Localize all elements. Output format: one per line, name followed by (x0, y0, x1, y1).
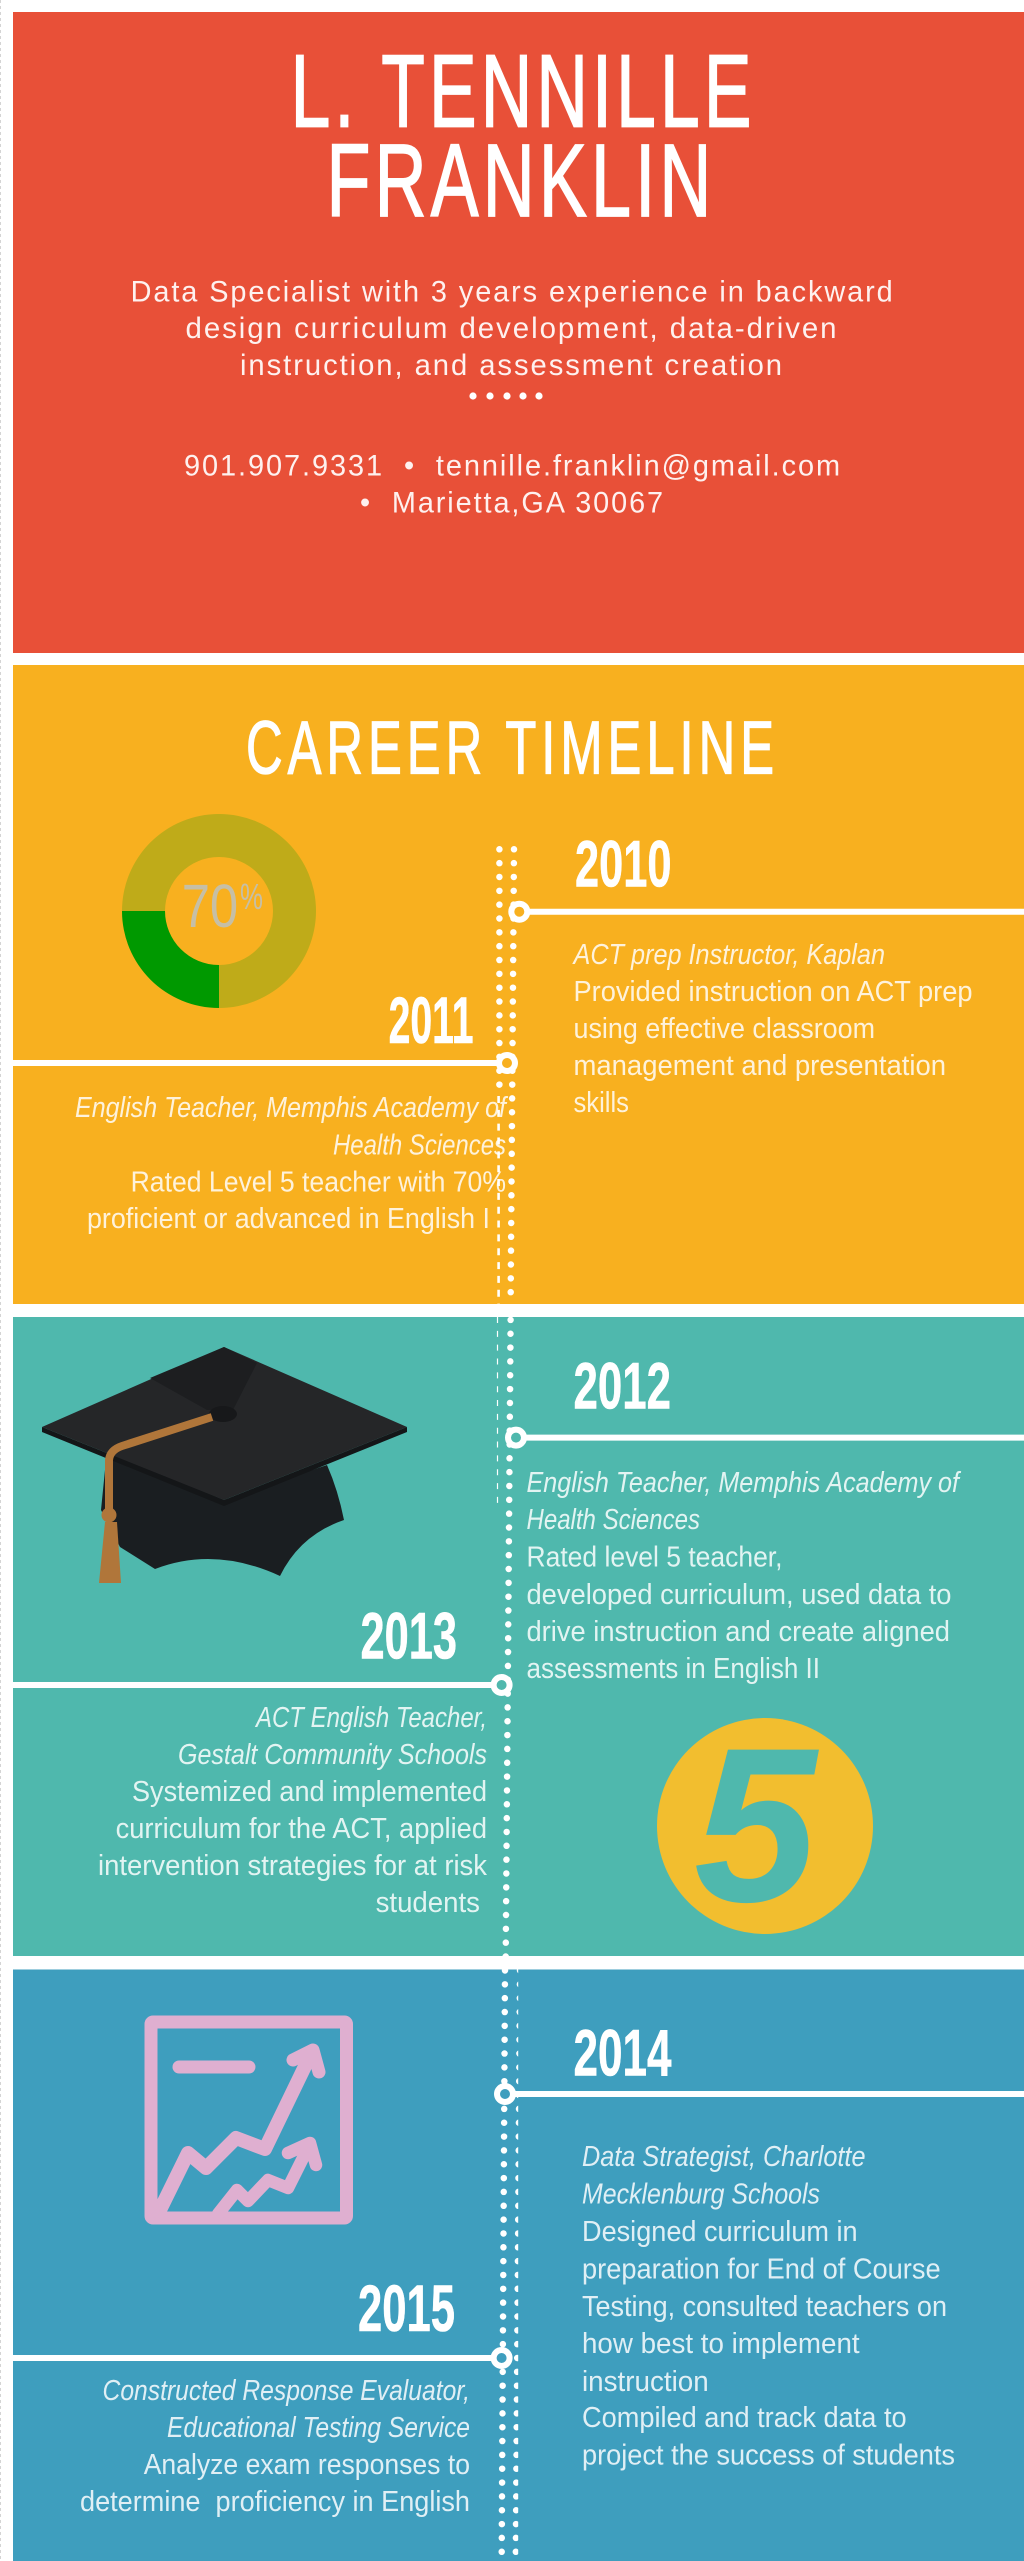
job: English teacher, level 5: assessments in English II (526, 1653, 820, 1685)
job: data strategist: Data Strategist, Charlotte (582, 2141, 866, 2173)
donut chart: 70% (122, 814, 316, 1008)
year: 2015: 2015 (358, 2271, 455, 2345)
job: constructed response evaluator: Educational Testing Service (167, 2412, 470, 2444)
summary text: instruction, and assessment creation (240, 349, 784, 382)
year: 2010: 2010 (575, 826, 672, 900)
job: data strategist: instruction (582, 2366, 709, 2398)
job: data strategist: preparation for End of Course (582, 2254, 941, 2286)
timeline marker: 2012 (508, 1430, 1024, 1446)
donut chart: 70%: 70 (182, 872, 238, 940)
job: English teacher Memphis Academy: English Teacher, Memphis Academy of (75, 1092, 509, 1124)
job: data strategist: Compiled and track data to (582, 2402, 907, 2434)
year: 2014: 2014 (574, 2016, 672, 2090)
title (291, 34, 756, 238)
year: 2013: 2013 (360, 1599, 457, 1673)
job: data strategist: project the success of students (582, 2439, 955, 2471)
timeline marker: 2010 (511, 904, 1024, 920)
timeline marker: 2015 (13, 2350, 510, 2366)
job: ACT English teacher: Systemized and implemented (132, 1776, 487, 1808)
title: FRANKLIN (327, 123, 716, 238)
year: 2011: 2011 (389, 983, 474, 1057)
timeline dots: right column (511, 849, 514, 1293)
job: ACT English teacher (98, 1702, 487, 1919)
job: ACT prep instructor: Provided instruction on ACT prep (574, 976, 972, 1008)
donut chart: 70%: % (240, 876, 263, 917)
panel: timeline 2014-2015 (13, 1970, 1024, 2561)
year: 2012: 2012 (574, 1349, 671, 1423)
contact details (184, 450, 842, 520)
icon: rising chart (151, 2022, 346, 2218)
job: ACT prep instructor: management and presentation (574, 1050, 946, 1082)
job: data strategist: Mecklenburg Schools (582, 2179, 820, 2211)
timeline dots: left column (495, 849, 503, 1304)
job: data strategist: Testing, consulted teachers on (582, 2291, 947, 2323)
job: data strategist: Designed curriculum in (582, 2216, 858, 2248)
job: ACT English teacher: ACT English Teacher, (254, 1702, 487, 1734)
timeline marker: 2013 (13, 1677, 510, 1693)
job: ACT English teacher: students (376, 1887, 480, 1919)
job: data strategist: how best to implement (582, 2328, 860, 2360)
job: constructed response evaluator: Analyze exam responses to (144, 2449, 470, 2481)
job: English teacher, level 5 (526, 1467, 962, 1685)
job: English teacher, level 5: developed curriculum, used data to (526, 1579, 952, 1611)
heading: career timeline: CAREER TIMELINE (246, 706, 779, 790)
job: English teacher Memphis Academy: Rated Level 5 teacher with 70% (131, 1167, 506, 1199)
summary text: design curriculum development, data-driven (186, 312, 838, 345)
icon: graduation cap (42, 1347, 407, 1583)
contact details: • Marietta,GA 30067 (360, 487, 665, 520)
job: English teacher, level 5: Rated level 5 teacher, (526, 1541, 782, 1573)
job: ACT prep instructor (572, 939, 972, 1119)
job: English teacher, level 5: drive instruction and create aligned (526, 1616, 950, 1648)
timeline marker: 2011 (13, 1055, 515, 1071)
job: English teacher, level 5: English Teacher, Memphis Academy of (526, 1467, 962, 1499)
badge: level 5 (657, 1702, 873, 1948)
panel: timeline 2012-2013 (13, 1317, 1024, 1957)
job: ACT English teacher: intervention strategies for at risk (98, 1850, 487, 1882)
job: ACT prep instructor: ACT prep Instructor, Kaplan (572, 939, 885, 971)
panel: header (13, 12, 1024, 653)
job: ACT prep instructor: using effective classroom (574, 1013, 875, 1045)
title: L. TENNILLE (291, 34, 756, 149)
timeline dots: clipped column (516, 1970, 520, 2552)
job: English teacher Memphis Academy (75, 1092, 509, 1235)
job: data strategist (582, 2141, 955, 2471)
timeline dots: faint column (496, 1317, 498, 1510)
job: constructed response evaluator: determine proficiency in English (80, 2486, 470, 2518)
timeline dots: main column (502, 1970, 505, 2552)
job: constructed response evaluator: Constructed Response Evaluator, (102, 2375, 470, 2407)
job: ACT English teacher: Gestalt Community Schools (178, 1739, 487, 1771)
job: ACT English teacher: curriculum for the ACT, applied (116, 1813, 487, 1845)
dot separator (469, 392, 543, 400)
summary text (131, 275, 895, 382)
job: ACT prep instructor: skills (574, 1087, 629, 1119)
job: constructed response evaluator (80, 2375, 470, 2518)
job: English teacher Memphis Academy: proficient or advanced in English I (87, 1203, 490, 1235)
badge: level 5: 5 (694, 1702, 819, 1948)
contact details: 901.907.9331 • tennille.franklin@gmail.com (184, 450, 842, 483)
job: English teacher, level 5: Health Sciences (526, 1504, 700, 1536)
panel: career timeline 2010-2011 (13, 665, 1024, 1304)
timeline dots: main column (506, 1320, 511, 1957)
summary text: Data Specialist with 3 years experience in backward (131, 275, 895, 308)
timeline marker: 2014 (497, 2086, 1024, 2102)
job: English teacher Memphis Academy: Health Sciences (333, 1130, 506, 1162)
